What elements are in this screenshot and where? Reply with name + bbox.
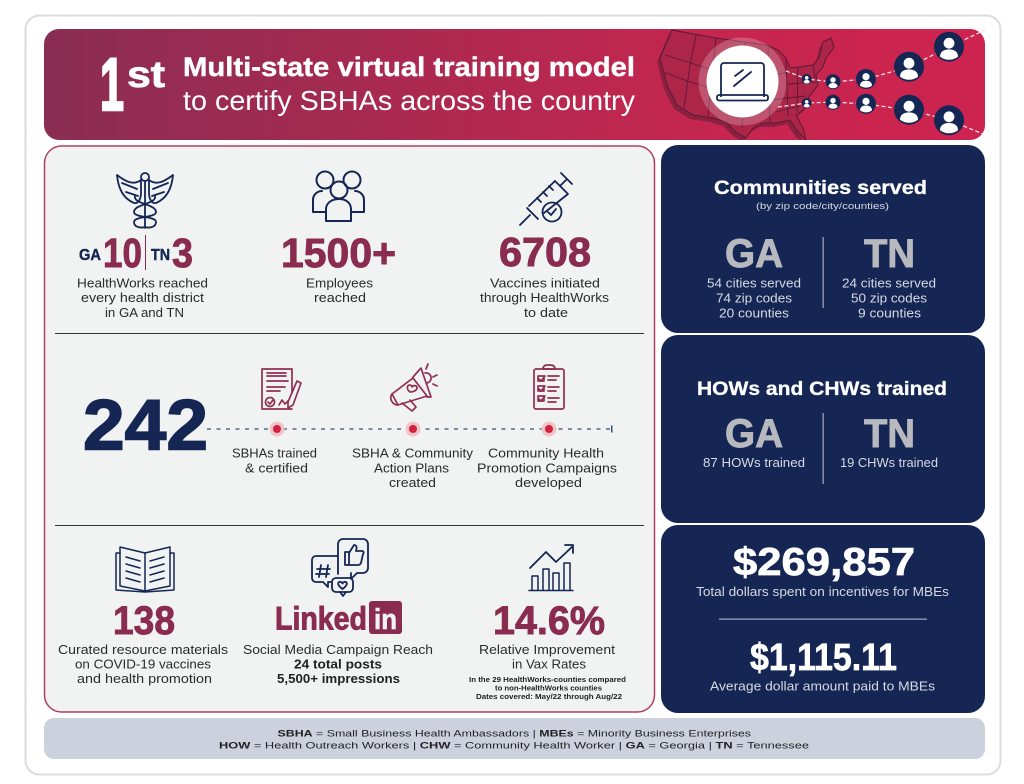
caption: action plans: SBHA & Community — [352, 446, 474, 460]
caption: vaccines — [480, 276, 609, 320]
column: Georgia: GA — [725, 232, 783, 276]
stat: GA 10 TN 3: 3 — [172, 230, 193, 276]
caption: resource materials — [58, 643, 228, 686]
caption: relative improvement: in Vax Rates — [512, 658, 586, 672]
caption: employees: reached — [314, 291, 366, 305]
icon: laptop in circle — [698, 38, 786, 126]
caption: SBHAs trained: SBHAs trained — [232, 446, 317, 460]
caption: vaccines: to date — [524, 306, 568, 320]
logo: LinkedIn: in — [374, 604, 397, 636]
column: Tennessee — [842, 232, 936, 320]
caption: social media reach — [243, 643, 433, 686]
footnote: study details: Dates covered: May/22 through Aug/22 — [476, 694, 622, 701]
logo: LinkedIn: Linked — [275, 600, 367, 636]
stat: total dollars — [696, 541, 949, 599]
heading: HOWs and CHWs trained: HOWs and CHWs trained — [697, 379, 947, 400]
caption: health districts: HealthWorks reached — [77, 276, 208, 290]
caption: vaccines: through HealthWorks — [480, 291, 609, 305]
caption: employees — [306, 276, 373, 305]
stat: average dollars: Average dollar amount paid to MBEs — [710, 680, 935, 694]
caption: resource materials: on COVID-19 vaccines — [75, 658, 211, 672]
icon: group of people — [313, 172, 364, 221]
caption: health districts: in GA and TN — [105, 306, 184, 320]
caption: campaigns: Promotion Campaigns — [477, 462, 617, 476]
column: Georgia trained — [703, 412, 805, 470]
footer: abbreviations legend — [44, 718, 985, 759]
icons: network of people — [802, 32, 964, 135]
stat: GA 10 TN 3: 10 — [103, 230, 142, 276]
caption: action plans: Action Plans — [374, 462, 449, 476]
stat: average dollars — [710, 637, 935, 694]
icon: syringe — [520, 173, 572, 225]
panel: HOWs and CHWs trained — [661, 335, 985, 523]
stat: total dollars: $269,857 — [733, 541, 915, 584]
banner — [44, 29, 985, 144]
caption: relative improvement: Relative Improvement — [479, 643, 616, 657]
heading: communities served: (by zip code/city/counties) — [756, 201, 889, 212]
caption: SBHAs trained: & certified — [245, 462, 308, 476]
caption: resource materials: Curated resource materials — [58, 643, 228, 657]
caption: campaigns — [477, 446, 617, 490]
icon: megaphone — [391, 364, 437, 411]
caption: relative improvement — [479, 643, 616, 672]
column: Tennessee: 50 zip codes — [851, 292, 927, 306]
column: Georgia: 54 cities served — [707, 276, 801, 290]
heading: communities served — [714, 178, 927, 212]
column: Tennessee trained — [840, 412, 938, 470]
footer: abbreviations legend: SBHA = Small Business Health Ambassadors | MBEs = Minority Business Enterprises — [278, 728, 751, 740]
column: Tennessee: 24 cities served — [842, 276, 936, 290]
timeline — [207, 422, 612, 436]
stat: total dollars: Total dollars spent on incentives for MBEs — [696, 585, 949, 599]
icon: social media bubbles — [312, 539, 368, 596]
caption: SBHAs trained — [232, 446, 317, 476]
stat: 14.6%: 14.6% — [493, 599, 605, 643]
caption: employees: Employees — [306, 276, 373, 290]
footnote: study details — [469, 677, 626, 701]
column: Tennessee: TN — [864, 232, 915, 276]
icon: open book — [116, 547, 174, 592]
footer: abbreviations legend: HOW = Health Outreach Workers | CHW = Community Health Worker | GA = Georgia | TN = Tennessee — [219, 740, 809, 752]
connection lines — [778, 30, 985, 134]
caption: campaigns: Community Health — [488, 446, 604, 460]
stat: 6708: 6708 — [499, 229, 591, 275]
caption: social media reach: 24 total posts — [294, 658, 382, 672]
banner heading: 1st — [100, 43, 165, 126]
caption: social media reach: Social Media Campaign Reach — [243, 643, 433, 657]
column: Georgia: 74 zip codes — [716, 292, 792, 306]
stat: GA 10 TN 3: GA — [79, 247, 101, 264]
caption: vaccines: Vaccines initiated — [490, 276, 600, 290]
banner heading: 1st: 1 — [100, 43, 124, 126]
column: Tennessee: 9 counties — [858, 306, 921, 320]
heading: communities served: Communities served — [714, 178, 927, 199]
stat: GA 10 TN 3 — [79, 230, 193, 276]
banner title: to certify SBHAs across the country — [183, 85, 635, 116]
stat: 242: 242 — [83, 386, 208, 466]
caption: social media reach: 5,500+ impressions — [277, 672, 400, 686]
panel: communities served — [661, 145, 985, 333]
column: Georgia: 20 counties — [719, 306, 789, 320]
footnote: study details: In the 29 HealthWorks-counties compared — [469, 677, 626, 684]
column: Tennessee trained: 19 CHWs trained — [840, 456, 938, 470]
caption: health districts — [77, 276, 208, 320]
column: Tennessee trained: TN — [864, 412, 915, 456]
column: Georgia trained: GA — [725, 412, 783, 456]
caption: health districts: every health district — [81, 291, 205, 305]
caption: campaigns: developed — [515, 476, 582, 490]
stat: 1500+: 1500+ — [281, 230, 396, 276]
caption: resource materials: and health promotion — [77, 672, 212, 686]
icon: clipboard checklist — [534, 365, 564, 409]
banner title: Multi-state virtual training model — [183, 52, 635, 82]
icon: signed document — [262, 369, 301, 409]
caption: action plans: created — [389, 476, 436, 490]
panel: MBE incentives — [661, 525, 985, 713]
panel: left statistics — [44, 146, 654, 712]
banner heading: 1st: st — [127, 54, 165, 95]
icon: bar chart with rising arrow — [529, 545, 573, 590]
stat: 138: 138 — [113, 599, 175, 643]
caption: action plans — [352, 446, 474, 490]
column: Georgia — [707, 232, 801, 320]
stat: average dollars: $1,115.11 — [750, 637, 897, 679]
column: Georgia trained: 87 HOWs trained — [703, 456, 805, 470]
map of the United States — [657, 30, 834, 144]
banner title — [183, 52, 635, 116]
icon: caduceus — [117, 173, 173, 228]
stat: GA 10 TN 3: TN — [151, 247, 170, 264]
footnote: study details: to non-HealthWorks counties — [495, 686, 602, 692]
